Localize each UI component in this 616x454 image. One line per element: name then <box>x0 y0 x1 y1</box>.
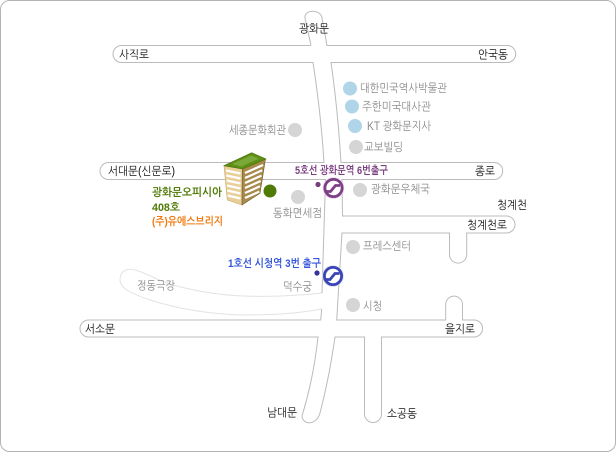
road: Jeongdong-gil <box>120 269 322 315</box>
road network <box>80 11 516 423</box>
label: 남대문: 남대문 <box>267 406 297 419</box>
landmark: 프레스센터: 프레스센터 <box>363 240 411 253</box>
office room number: 408호 <box>152 201 181 214</box>
landmark: KT 광화문지사: KT 광화문지사 <box>367 120 431 133</box>
landmark: 광화문우체국 <box>353 183 430 197</box>
label: 청계천로: 청계천로 <box>467 219 507 232</box>
landmark: 덕수궁: 덕수궁 <box>283 280 312 293</box>
office name: 광화문오피시아 <box>152 186 223 199</box>
landmark: 광화문우체국: 광화문우체국 <box>371 183 430 196</box>
landmark: 교보빌딩 <box>349 140 403 154</box>
label: 청계천: 청계천 <box>497 199 527 212</box>
label: 서소문: 서소문 <box>85 323 115 336</box>
landmark: 시청 <box>346 298 382 313</box>
label: line 1 exit: 1호선 시청역 3번 출구 <box>228 257 322 270</box>
label: 사직로: 사직로 <box>119 48 149 61</box>
landmark: 프레스센터 <box>346 240 411 254</box>
label: 안국동: 안국동 <box>478 48 508 61</box>
landmark: KT 광화문지사 <box>348 119 431 133</box>
marker: office location <box>264 184 276 198</box>
marker: line 5 exit dot <box>315 182 321 187</box>
label: 종로: 종로 <box>475 165 495 178</box>
landmark: 주한미국대사관: 주한미국대사관 <box>362 100 431 113</box>
icon: office building <box>224 153 266 205</box>
landmark: 대한민국역사박물관: 대한민국역사박물관 <box>360 82 447 95</box>
landmark: 동화면세점: 동화면세점 <box>273 207 322 220</box>
landmark: 동화면세점 <box>273 190 322 220</box>
landmark: 정동극장: 정동극장 <box>137 279 175 292</box>
label: 을지로: 을지로 <box>445 323 475 336</box>
label: line 5 exit: 5호선 광화문역 6번출구 <box>295 164 389 177</box>
landmark: 주한미국대사관 <box>345 100 431 114</box>
marker: line 1 exit dot <box>314 270 320 276</box>
landmark: 교보빌딩: 교보빌딩 <box>364 141 403 154</box>
label: 소공동: 소공동 <box>387 407 417 420</box>
icon: line 5 subway <box>323 177 344 199</box>
label: 광화문: 광화문 <box>299 22 329 35</box>
label: 서대문(신문로): 서대문(신문로) <box>108 165 175 178</box>
company name: (주)유에스브리지 <box>152 215 223 228</box>
landmark: 시청: 시청 <box>363 300 382 313</box>
landmark: 대한민국역사박물관 <box>343 82 447 96</box>
landmark: 세종문화회관: 세종문화회관 <box>229 124 286 137</box>
icon: line 1 subway <box>322 265 344 287</box>
